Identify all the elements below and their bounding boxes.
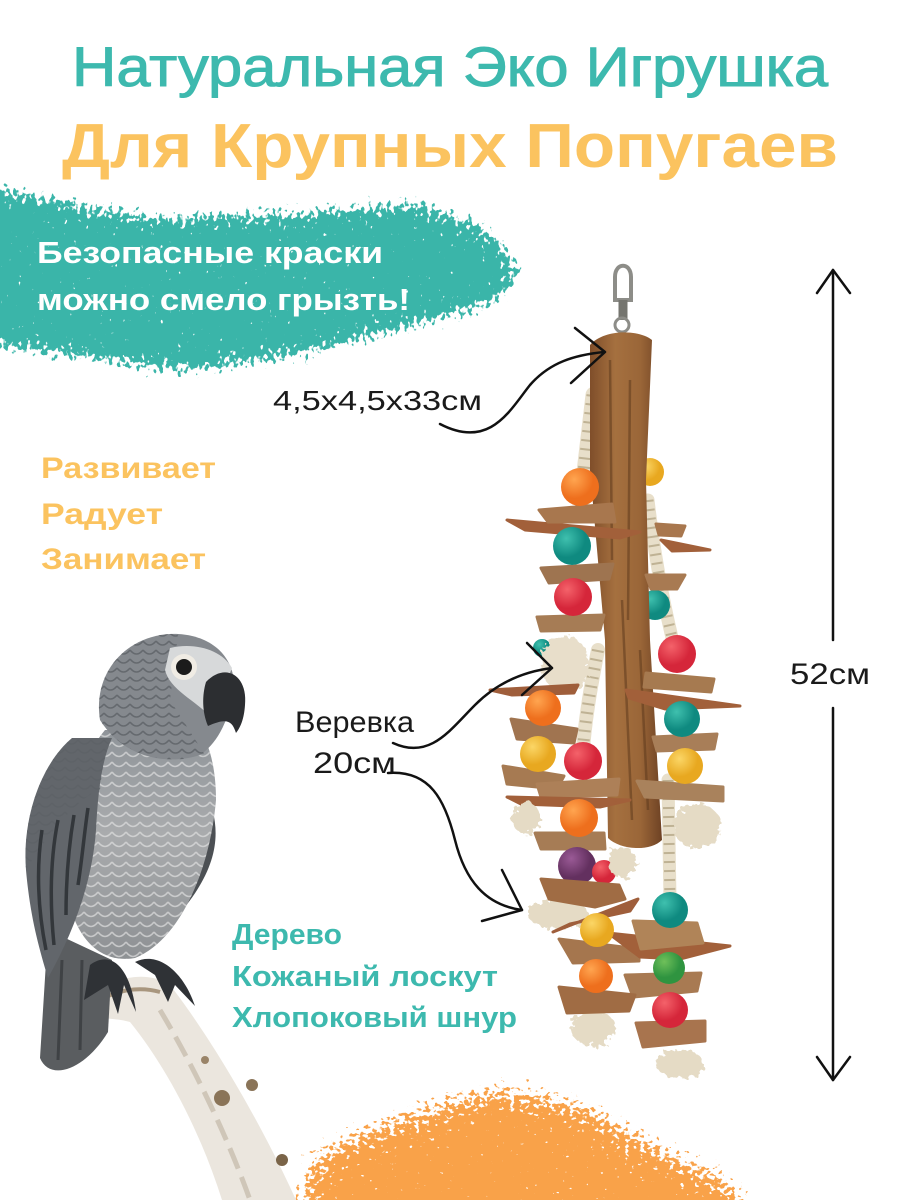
arrow: stick callout [440, 328, 605, 432]
label: rope length: 20см [313, 747, 396, 780]
banner text: Безопасные краски [37, 235, 383, 270]
title: line one: Натуральная Эко Игрушка [72, 35, 829, 98]
lower beads [652, 892, 688, 928]
back beads [636, 458, 664, 486]
materials list: Дерево [232, 919, 342, 951]
back ropes [582, 395, 675, 900]
materials list: Хлопоковый шнур [232, 1002, 517, 1034]
middle beads [658, 635, 696, 673]
banner text: можно смело грызть! [37, 282, 410, 317]
benefits list: Радует [41, 498, 163, 531]
title: line two: Для Крупных Попугаев [62, 112, 838, 181]
materials list [232, 919, 517, 1034]
tail [40, 930, 112, 1070]
arrow: rope lower [388, 773, 522, 921]
metal hook [615, 266, 631, 332]
label: rope length [295, 706, 414, 780]
wood slices upper [507, 504, 710, 631]
toy [490, 266, 740, 1078]
beak [203, 672, 245, 733]
rope knot middle [541, 636, 589, 692]
rope knots lower [512, 802, 721, 1078]
middle slices [490, 673, 740, 849]
main wood stick [590, 332, 662, 848]
branch [78, 977, 296, 1200]
teal brush banner [0, 172, 532, 378]
near wing [25, 738, 112, 978]
head [99, 634, 234, 759]
benefits list: Развивает [41, 452, 216, 485]
upper beads [561, 468, 599, 506]
face patch [165, 646, 232, 718]
body [64, 730, 216, 959]
arrow: rope upper [393, 643, 552, 748]
lower slices [541, 879, 730, 1047]
label: rope length: Веревка [295, 706, 414, 739]
benefits list: Занимает [41, 543, 206, 576]
banner text [37, 235, 410, 317]
front rope [582, 650, 598, 760]
far wing [165, 790, 216, 922]
dimension arrow: height [817, 270, 850, 1080]
parrot on branch [25, 634, 296, 1200]
label: stick size: 4,5x4,5x33см [273, 385, 482, 416]
orange brush bottom [285, 1078, 760, 1200]
eye [171, 654, 197, 680]
benefits list [41, 452, 216, 576]
label: height: 52см [790, 658, 870, 691]
materials list: Кожаный лоскут [232, 961, 498, 993]
claws [84, 959, 136, 1014]
